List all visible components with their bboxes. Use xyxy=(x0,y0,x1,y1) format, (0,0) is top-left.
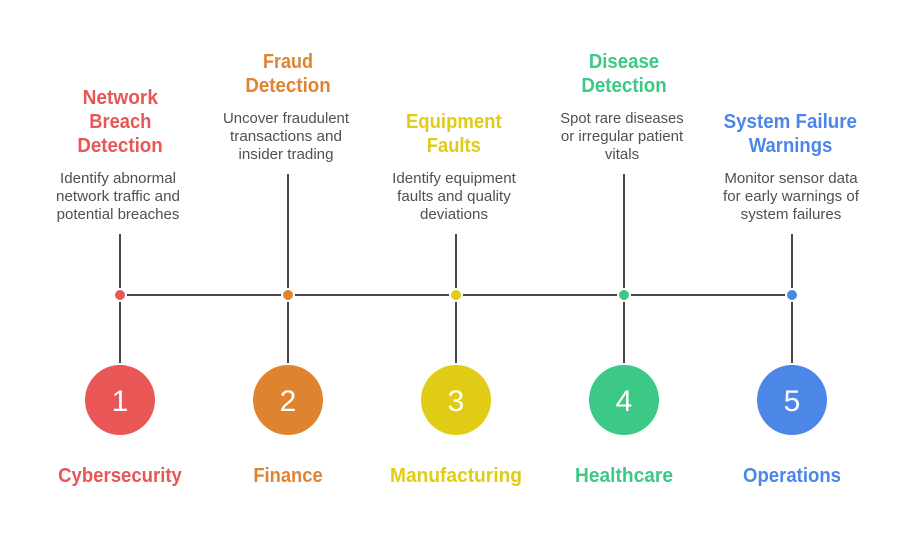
heading: disease detection: Detection xyxy=(581,75,667,97)
label: manufacturing: Manufacturing xyxy=(390,465,522,487)
text: finance description: insider trading xyxy=(238,147,334,163)
heading: equipment faults: Faults xyxy=(427,135,481,157)
heading: fraud detection: Fraud xyxy=(263,51,313,73)
heading: network breach detection: Breach xyxy=(89,111,151,133)
heading: system failure warnings: Warnings xyxy=(749,135,832,157)
number 1: 1 xyxy=(112,385,128,418)
text: healthcare description: vitals xyxy=(605,147,639,163)
marker: manufacturing xyxy=(450,289,462,301)
label: cybersecurity: Cybersecurity xyxy=(58,465,183,487)
text: cybersecurity description: Identify abnormal xyxy=(60,171,176,187)
label: finance: Finance xyxy=(253,465,323,487)
heading: system failure warnings: System Failure xyxy=(724,111,857,133)
text: finance description: transactions and xyxy=(230,129,342,145)
text: cybersecurity description: network traffic and xyxy=(56,189,180,205)
text: operations description xyxy=(723,171,860,223)
heading: disease detection: Disease xyxy=(589,51,659,73)
text: operations description: for early warnings of xyxy=(723,189,860,205)
text: healthcare description: or irregular patient xyxy=(561,129,683,145)
heading: network breach detection: Network xyxy=(83,87,159,109)
number circle 4 xyxy=(589,365,659,435)
label: operations: Operations xyxy=(743,465,841,487)
panel: manufacturing xyxy=(390,111,522,487)
marker: cybersecurity xyxy=(114,289,126,301)
marker: operations xyxy=(786,289,798,301)
heading: equipment faults xyxy=(406,111,502,157)
number 2: 2 xyxy=(280,385,296,418)
number circle 5 xyxy=(757,365,827,435)
text: cybersecurity description: potential breaches xyxy=(57,207,179,223)
text: cybersecurity description xyxy=(56,171,180,223)
number circle 2 xyxy=(253,365,323,435)
text: finance description: Uncover fraudulent xyxy=(223,111,349,127)
connector: cybersecurity xyxy=(119,234,121,363)
heading: fraud detection: Detection xyxy=(245,75,331,97)
number circle 1 xyxy=(85,365,155,435)
marker: healthcare xyxy=(618,289,630,301)
panel: finance xyxy=(223,51,349,487)
text: finance description xyxy=(223,111,349,163)
heading: equipment faults: Equipment xyxy=(406,111,502,133)
panel: cybersecurity xyxy=(56,87,183,487)
heading: network breach detection xyxy=(77,87,163,157)
text: manufacturing description: Identify equipment xyxy=(392,171,516,187)
text: healthcare description xyxy=(560,111,684,163)
connector: finance xyxy=(287,174,289,363)
number circle 3 xyxy=(421,365,491,435)
panel: operations xyxy=(723,111,860,487)
text: healthcare description: Spot rare diseases xyxy=(560,111,684,127)
connector: operations xyxy=(791,234,793,363)
marker: finance xyxy=(282,289,294,301)
number 3: 3 xyxy=(448,385,464,418)
heading: fraud detection xyxy=(245,51,331,97)
heading: network breach detection: Detection xyxy=(77,135,163,157)
timeline axis xyxy=(120,294,792,296)
connector: healthcare xyxy=(623,174,625,363)
panel: healthcare xyxy=(560,51,684,487)
connector: manufacturing xyxy=(455,234,457,363)
heading: disease detection xyxy=(581,51,667,97)
heading: system failure warnings xyxy=(724,111,857,157)
number 5: 5 xyxy=(784,385,800,418)
text: operations description: system failures xyxy=(741,207,841,223)
text: manufacturing description xyxy=(392,171,516,223)
label: healthcare: Healthcare xyxy=(575,465,673,487)
text: manufacturing description: deviations xyxy=(420,207,488,223)
text: manufacturing description: faults and quality xyxy=(397,189,512,205)
text: operations description: Monitor sensor data xyxy=(724,171,859,187)
number 4: 4 xyxy=(616,385,632,418)
